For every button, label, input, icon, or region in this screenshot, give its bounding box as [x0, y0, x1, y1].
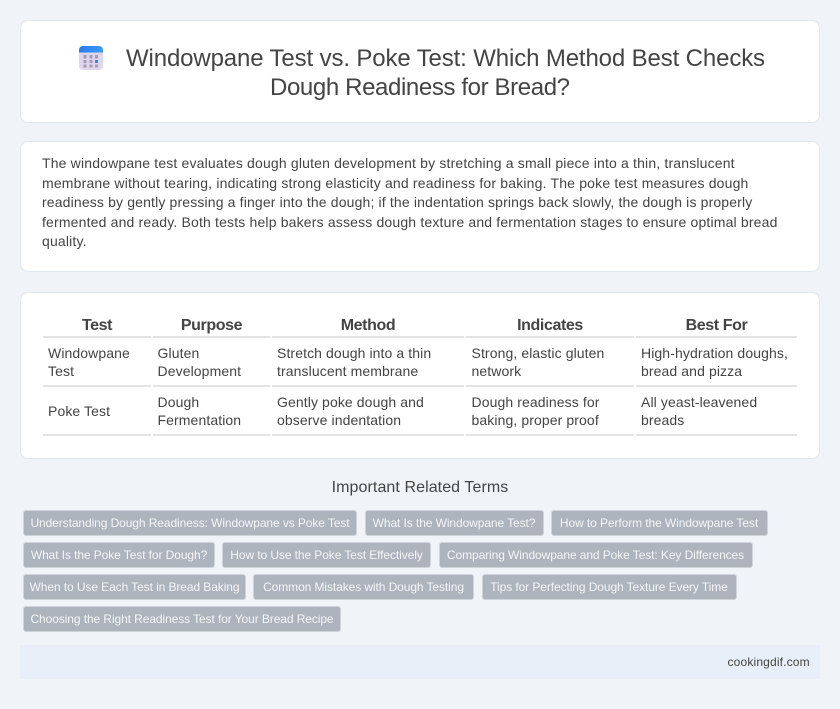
- footer source: cookingdif.com: [728, 655, 810, 669]
- title: [126, 45, 765, 101]
- title: Dough Readiness for Bread?: [270, 74, 570, 101]
- comparison table: Test: [82, 317, 112, 334]
- comparison table: Method: [341, 317, 395, 334]
- comparison table: translucent membrane: [277, 363, 418, 379]
- comparison table: High-hydration doughs,: [641, 345, 788, 361]
- summary text: [42, 155, 778, 249]
- table panel: [20, 292, 820, 459]
- related term tags: Tips for Perfecting Dough Texture Every Time: [490, 580, 728, 594]
- comparison table: breads: [641, 412, 684, 428]
- comparison table: Test: [48, 363, 74, 379]
- comparison table: Purpose: [181, 317, 242, 334]
- summary text: quality.: [42, 233, 87, 249]
- title: Windowpane Test vs. Poke Test: Which Method Best Checks: [126, 45, 765, 72]
- related term tags: How to Use the Poke Test Effectively: [230, 548, 423, 562]
- comparison table: Indicates: [517, 317, 583, 334]
- related term tags: What Is the Windowpane Test?: [373, 516, 535, 530]
- header panel: [20, 20, 820, 123]
- icon: calendar: [79, 46, 103, 70]
- comparison table: All yeast-leavened: [641, 394, 757, 410]
- related term tags: [23, 510, 768, 632]
- summary text: readiness by gently pressing a finger into the dough; if the indentation springs back slowly, the dough is properly: [42, 194, 752, 210]
- comparison table: observe indentation: [277, 412, 401, 428]
- comparison table: baking, proper proof: [472, 412, 599, 428]
- comparison table: Gently poke dough and: [277, 394, 424, 410]
- comparison table: Dough readiness for: [472, 394, 599, 410]
- comparison table: bread and pizza: [641, 363, 742, 379]
- related term tags: What Is the Poke Test for Dough?: [31, 548, 207, 562]
- summary text: membrane without tearing, indicating strong elasticity and readiness for baking. The poke test measures dough: [42, 175, 749, 191]
- related terms heading: Important Related Terms: [332, 479, 508, 496]
- summary text: The windowpane test evaluates dough gluten development by stretching a small piece into a thin, translucent: [42, 155, 735, 171]
- summary text: fermented and ready. Both tests help bakers assess dough texture and fermentation stages to ensure optimal bread: [42, 214, 778, 230]
- comparison table: Dough: [158, 394, 199, 410]
- comparison table: Fermentation: [158, 412, 241, 428]
- comparison table: Stretch dough into a thin: [277, 345, 431, 361]
- related term tags: How to Perform the Windowpane Test: [560, 516, 758, 530]
- related term tags: Comparing Windowpane and Poke Test: Key Differences: [447, 548, 744, 562]
- comparison table: Poke Test: [48, 403, 110, 419]
- related term tags: Common Mistakes with Dough Testing: [263, 580, 464, 594]
- comparison table: Development: [158, 363, 241, 379]
- summary panel: [20, 141, 820, 272]
- related term tags: When to Use Each Test in Bread Baking: [30, 580, 239, 594]
- comparison table: [43, 317, 797, 436]
- footer bar: [20, 645, 820, 679]
- related term tags: Understanding Dough Readiness: Windowpane vs Poke Test: [30, 516, 350, 530]
- comparison table: Strong, elastic gluten: [472, 345, 604, 361]
- comparison table: Best For: [686, 317, 747, 334]
- comparison table: network: [472, 363, 521, 379]
- related term tags: Choosing the Right Readiness Test for Your Bread Recipe: [30, 612, 334, 626]
- comparison table: Windowpane: [48, 345, 130, 361]
- comparison table: Gluten: [158, 345, 199, 361]
